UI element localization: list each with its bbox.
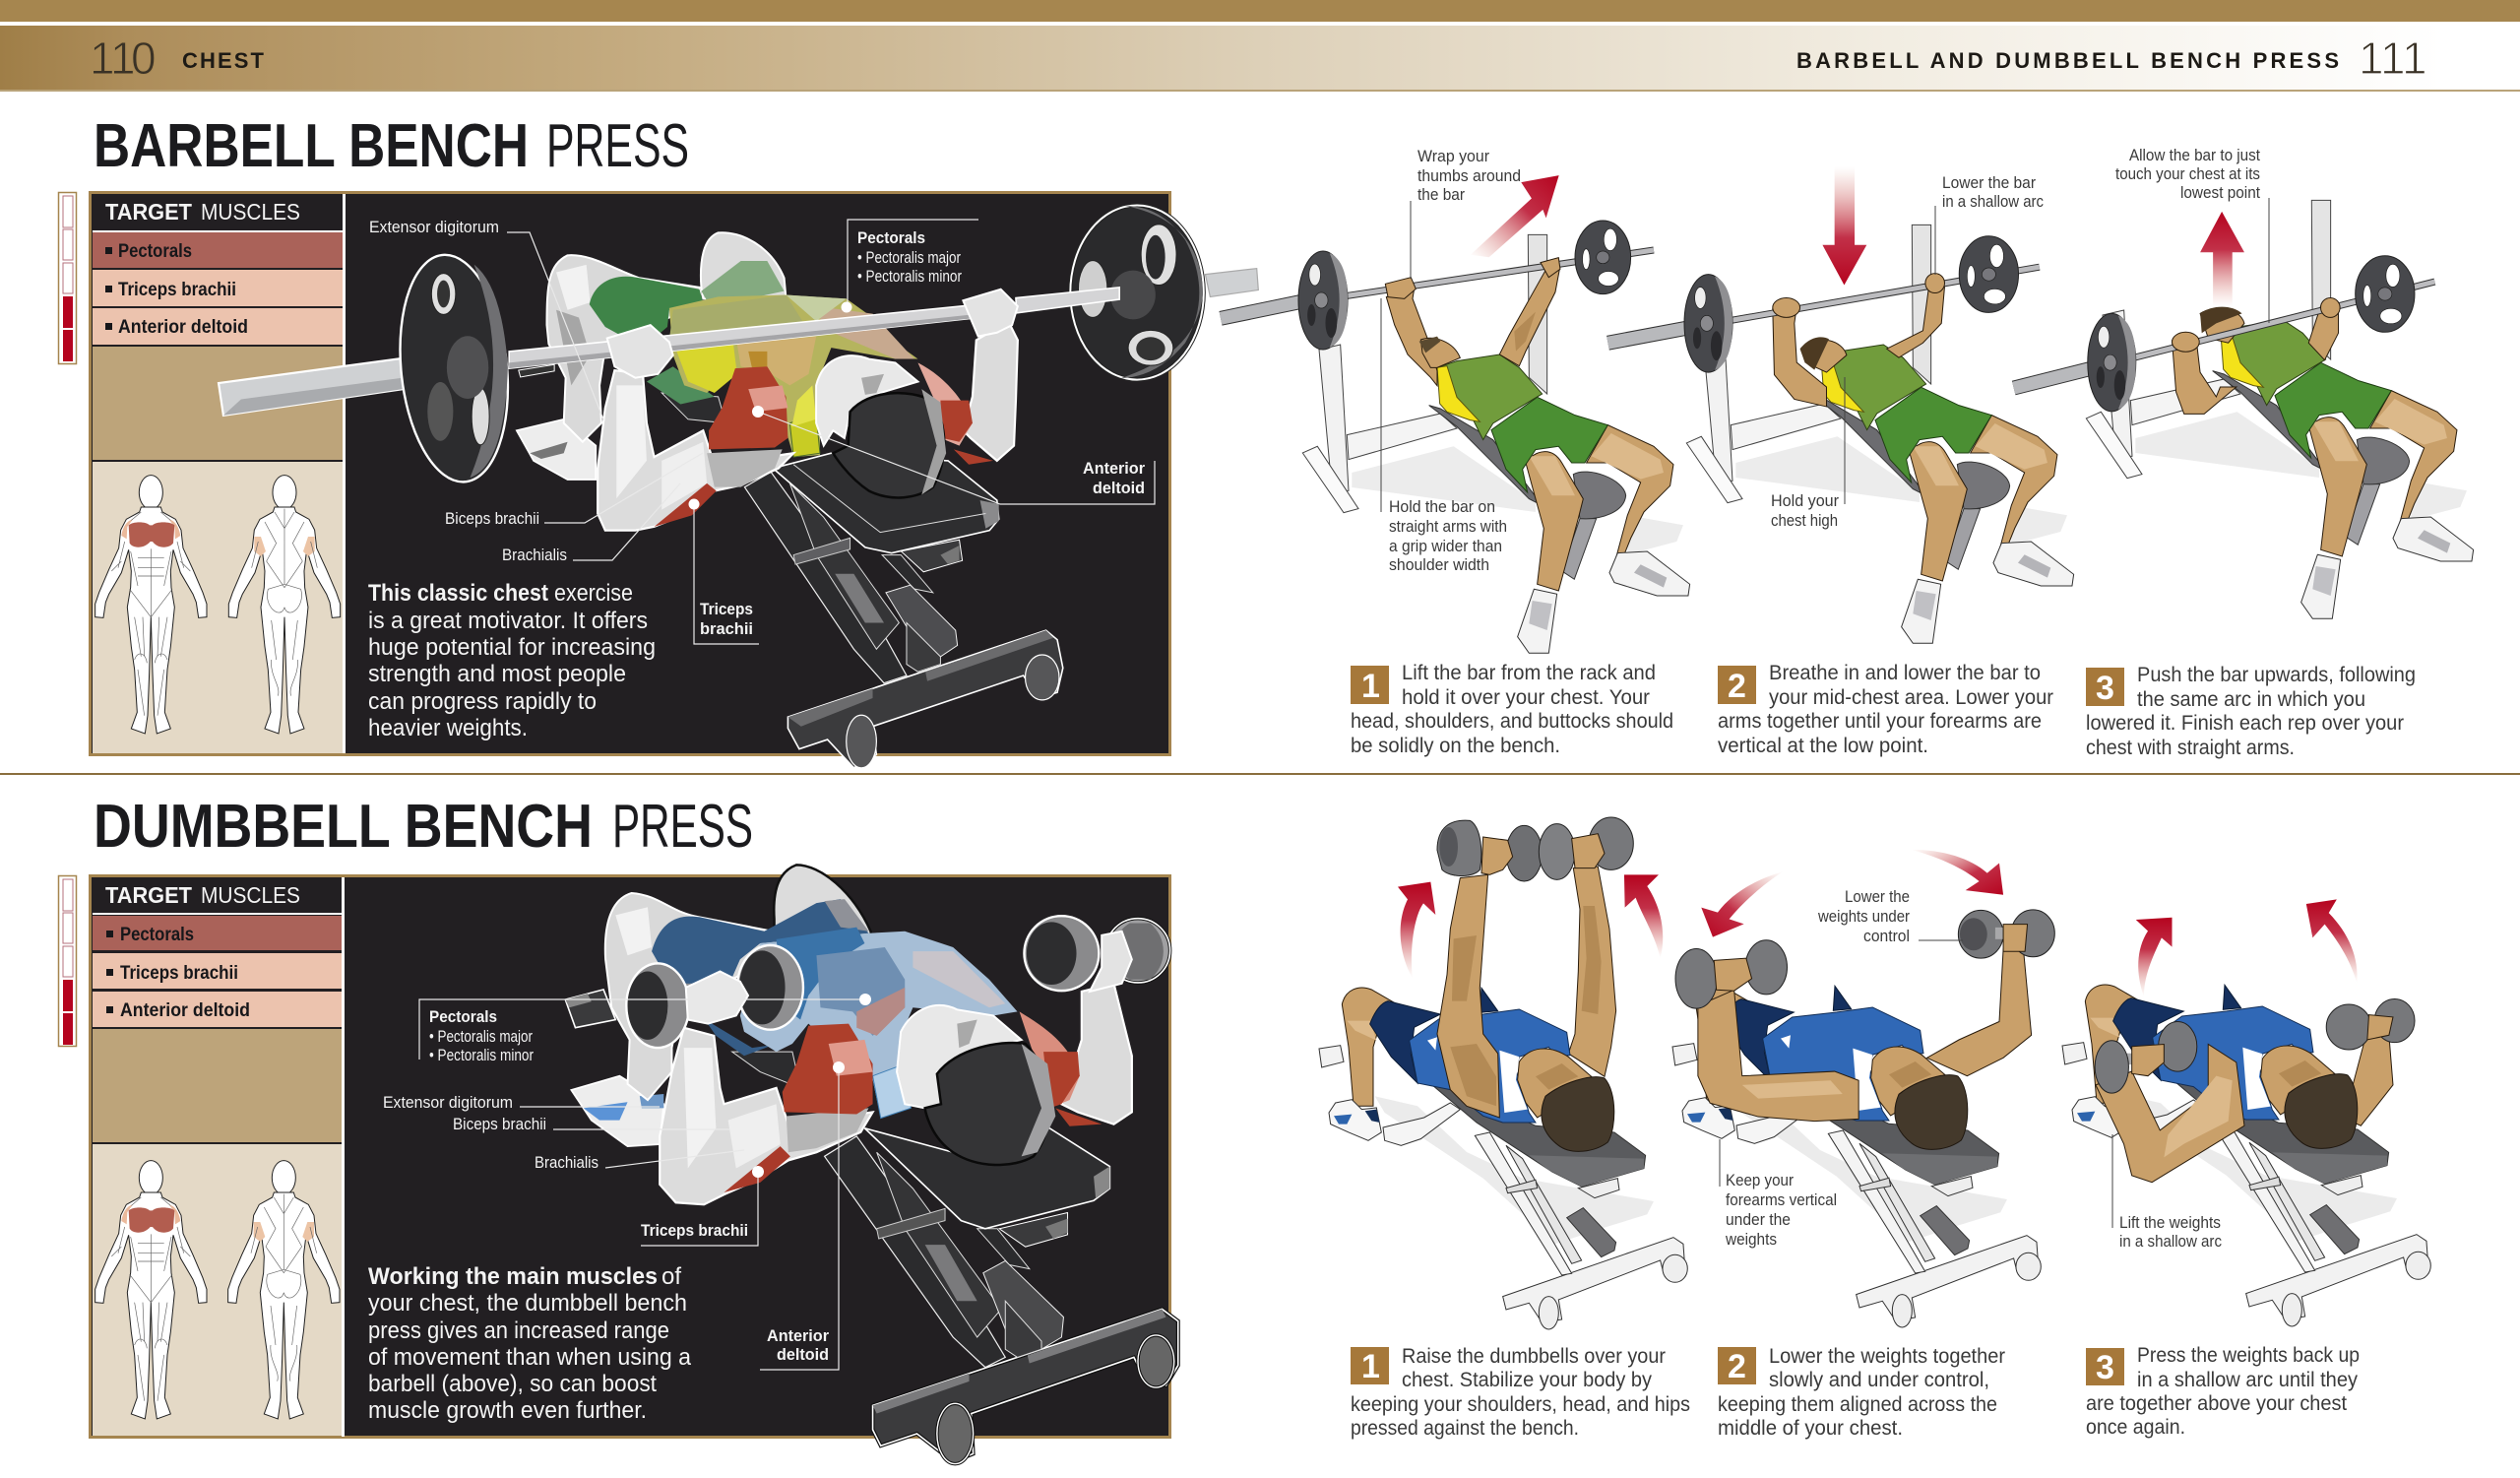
- step text: dumbbell 1: chest. Stabilize your body by: [1402, 1369, 1652, 1391]
- difficulty indicator: barbell: [59, 193, 77, 364]
- target muscles list: Pectorals: [118, 241, 192, 262]
- intro text: barbell: is a great motivator. It offers: [368, 608, 648, 634]
- callouts: barbell anatomy: Biceps brachii: [445, 509, 539, 528]
- intro text: barbell: can progress rapidly to: [368, 688, 597, 715]
- step text: barbell 1: be solidly on the bench.: [1351, 735, 1560, 757]
- step text: dumbbell 3: once again.: [2086, 1416, 2185, 1439]
- target muscles list: Anterior deltoid: [120, 1000, 250, 1021]
- step text: barbell 2: your mid-chest area. Lower your: [1769, 686, 2053, 709]
- intro text: barbell: This classic chest: [368, 580, 548, 607]
- callouts: barbell steps: straight arms with: [1389, 517, 1507, 536]
- top colour band: [0, 0, 2520, 22]
- callouts: dumbbell steps: Keep your: [1726, 1171, 1794, 1189]
- target muscles list: Anterior deltoid: [118, 317, 248, 338]
- callouts: barbell steps: Lower the bar: [1942, 173, 2036, 192]
- callouts: barbell steps: shoulder width: [1389, 555, 1489, 574]
- illustration: dumbbell press anatomical figure: [565, 865, 1178, 1464]
- callouts: dumbbell steps: under the: [1726, 1210, 1791, 1229]
- callouts: dumbbell anatomy: Pectorals: [429, 1007, 497, 1026]
- step text: barbell 2: arms together until your forearms are: [1718, 710, 2042, 733]
- near arm with triceps and deltoid: [598, 366, 793, 531]
- step text: dumbbell 3: Press the weights back up: [2137, 1344, 2360, 1367]
- callouts: barbell steps: a grip wider than: [1389, 537, 1502, 555]
- step text: dumbbell 2: [1718, 1345, 2005, 1440]
- step text: dumbbell 1: keeping your shoulders, head, and hips: [1351, 1393, 1690, 1416]
- head: [897, 1005, 1055, 1165]
- illustration: barbell step 3 figure: [2014, 200, 2474, 618]
- intro text: barbell: exercise: [554, 580, 633, 607]
- callouts: dumbbell anatomy: Biceps brachii: [453, 1115, 546, 1133]
- bench frame: [565, 990, 1178, 1464]
- callouts: barbell steps: Wrap your: [1418, 147, 1489, 165]
- callouts: barbell steps: [1381, 146, 2269, 574]
- title: barbell bench press: PRESS: [546, 112, 689, 180]
- step text: barbell 1: Lift the bar from the rack and: [1402, 662, 1656, 684]
- arrow: dumbbell step 2 left: [1701, 871, 1784, 937]
- callouts: dumbbell anatomy: Anterior: [767, 1326, 829, 1345]
- difficulty indicator: dumbbell: [59, 876, 77, 1046]
- intro text: dumbbell: of movement than when using a: [368, 1344, 691, 1371]
- illustration: dumbbell step 3 figure: [2062, 985, 2430, 1326]
- callouts: barbell steps: chest high: [1771, 511, 1838, 530]
- target muscles list: [93, 199, 343, 345]
- step text: barbell 3: chest with straight arms.: [2086, 737, 2295, 759]
- panel: dumbbell anatomy: [91, 865, 1178, 1464]
- step text: dumbbell 1: 1: [1361, 1348, 1380, 1385]
- callouts: dumbbell anatomy: [383, 994, 871, 1370]
- step text: barbell 1: head, shoulders, and buttocks should: [1351, 710, 1673, 733]
- step text: barbell 3: Push the bar upwards, following: [2137, 664, 2416, 686]
- callouts: dumbbell anatomy: Extensor digitorum: [383, 1093, 513, 1112]
- torso: [669, 295, 917, 457]
- callouts: barbell anatomy: Anterior: [1083, 459, 1145, 478]
- tan filler block: [93, 347, 343, 460]
- callouts: barbell anatomy: deltoid: [1093, 479, 1145, 497]
- target muscles list: Pectorals: [120, 925, 194, 945]
- callouts: barbell anatomy: • Pectoralis minor: [857, 267, 962, 286]
- step text: dumbbell 3: in a shallow arc until they: [2137, 1369, 2358, 1391]
- illustration: dumbbell step 2 figure: [1672, 910, 2054, 1327]
- step text: barbell 3: [2086, 664, 2416, 759]
- step text: barbell 1: [1351, 662, 1673, 757]
- target muscles list: Triceps brachii: [118, 280, 236, 300]
- callouts: barbell anatomy: Triceps: [700, 600, 753, 618]
- step text: barbell 1: 1: [1361, 668, 1380, 705]
- body map: pectorals highlighted: [93, 462, 343, 753]
- running header band: 110: [90, 32, 157, 84]
- callouts: barbell steps: in a shallow arc: [1942, 192, 2044, 211]
- running header band: [0, 26, 2520, 92]
- target muscles list: TARGET: [105, 199, 192, 225]
- callouts: dumbbell steps: forearms vertical: [1726, 1190, 1837, 1209]
- bar and hands: [509, 288, 1119, 378]
- arrow: dumbbell step 1 left: [1398, 882, 1435, 978]
- arrow: dumbbell step 1 right: [1624, 874, 1663, 958]
- step text: barbell 3: 3: [2096, 670, 2114, 707]
- shorts, navy: [652, 899, 868, 1056]
- near dumbbell with hand: [626, 945, 803, 1048]
- callouts: barbell anatomy: Brachialis: [502, 546, 567, 564]
- panel: barbell anatomy: [91, 193, 1258, 768]
- illustration: barbell plates and sleeves: [219, 205, 1258, 483]
- bench frame: [519, 364, 1063, 768]
- callouts: dumbbell anatomy: deltoid: [777, 1345, 829, 1364]
- divider between exercises: [0, 773, 2520, 775]
- callouts: barbell anatomy: Extensor digitorum: [369, 218, 499, 236]
- target muscles list: [93, 882, 342, 1027]
- far arm with deltoid: [917, 321, 1018, 465]
- callouts: barbell steps: Hold your: [1771, 491, 1839, 510]
- arrow: barbell step 1 lift: [1471, 175, 1559, 257]
- callouts: barbell steps: Allow the bar to just: [2129, 146, 2260, 164]
- intro text: dumbbell: of: [662, 1263, 681, 1290]
- step text: barbell 3: lowered it. Finish each rep over your: [2086, 712, 2404, 735]
- step text: barbell 2: vertical at the low point.: [1718, 735, 1928, 757]
- step text: dumbbell 1: pressed against the bench.: [1351, 1417, 1579, 1440]
- step text: dumbbell 1: [1351, 1345, 1690, 1440]
- step text: dumbbell 3: are together above your chest: [2086, 1392, 2347, 1415]
- callouts: dumbbell anatomy: • Pectoralis minor: [429, 1046, 534, 1064]
- step text: dumbbell 2: Lower the weights together: [1769, 1345, 2005, 1368]
- step text: dumbbell 1: Raise the dumbbells over your: [1402, 1345, 1666, 1368]
- arrow: barbell step 3 push: [2200, 212, 2244, 306]
- callouts: dumbbell steps: in a shallow arc: [2119, 1232, 2222, 1251]
- intro text: dumbbell: [368, 1263, 691, 1424]
- title: dumbbell bench press: DUMBBELL BENCH: [94, 793, 593, 861]
- target muscles list: MUSCLES: [201, 882, 300, 908]
- callouts: barbell anatomy: brachii: [700, 619, 753, 638]
- title: barbell bench press: BARBELL BENCH: [94, 112, 529, 180]
- running header band: CHEST: [182, 48, 265, 73]
- callouts: dumbbell steps: weights under: [1817, 907, 1910, 926]
- legs and shoe: [571, 865, 873, 1146]
- body map: pectorals highlighted: [93, 1144, 342, 1436]
- near arm with triceps and deltoid: [660, 1024, 873, 1204]
- illustration: barbell step 2 figure: [1607, 225, 2074, 643]
- target muscles list: Triceps brachii: [120, 963, 238, 984]
- illustration: barbell step 1 figure: [1221, 221, 1690, 653]
- running header band: 111: [2359, 32, 2427, 84]
- arrow: barbell step 2 lower: [1822, 166, 1866, 286]
- step text: dumbbell 2: middle of your chest.: [1718, 1417, 1903, 1440]
- legs and shoe: [517, 232, 787, 480]
- callouts: dumbbell steps: control: [1863, 927, 1910, 945]
- step text: dumbbell 3: 3: [2096, 1349, 2114, 1386]
- intro text: dumbbell: press gives an increased range: [368, 1317, 669, 1344]
- target muscles list: MUSCLES: [201, 199, 300, 225]
- callouts: dumbbell steps: Lift the weights: [2119, 1213, 2221, 1232]
- callouts: dumbbell steps: weights: [1725, 1230, 1777, 1249]
- intro text: barbell: huge potential for increasing: [368, 634, 656, 661]
- far dumbbell: [1024, 916, 1170, 992]
- step text: barbell 2: [1718, 662, 2053, 757]
- callouts: barbell steps: Hold the bar on: [1389, 497, 1495, 516]
- illustration: dumbbell step 1 figure: [1319, 817, 1687, 1329]
- arrow: dumbbell step 3 right: [2306, 899, 2358, 983]
- step text: dumbbell 2: keeping them aligned across the: [1718, 1393, 1997, 1416]
- head: [816, 355, 946, 497]
- step text: dumbbell 3: [2086, 1344, 2360, 1439]
- arrow: dumbbell step 2 right: [1911, 850, 2003, 895]
- callouts: barbell anatomy: Pectorals: [857, 228, 925, 247]
- tan filler block: [93, 1029, 342, 1142]
- intro text: barbell: heavier weights.: [368, 715, 528, 741]
- intro text: dumbbell: barbell (above), so can boost: [368, 1371, 657, 1397]
- intro text: barbell: [368, 580, 656, 741]
- illustration: barbell press anatomical figure: [509, 232, 1119, 768]
- intro text: barbell: strength and most people: [368, 661, 626, 687]
- callouts: dumbbell anatomy: • Pectoralis major: [429, 1027, 533, 1046]
- callouts: dumbbell steps: [1720, 887, 2222, 1251]
- shorts, green: [590, 261, 785, 404]
- torso: [740, 899, 1018, 1119]
- arrow: dumbbell step 3 left: [2136, 918, 2173, 996]
- title: dumbbell bench press: PRESS: [612, 793, 753, 861]
- callouts: barbell steps: lowest point: [2180, 183, 2260, 202]
- step text: barbell 1: hold it over your chest. Your: [1402, 686, 1650, 709]
- callouts: barbell steps: thumbs around: [1418, 166, 1521, 185]
- intro text: dumbbell: your chest, the dumbbell bench: [368, 1290, 687, 1317]
- step text: dumbbell 2: 2: [1728, 1348, 1746, 1385]
- target muscles list: TARGET: [105, 882, 192, 908]
- step text: dumbbell 2: slowly and under control,: [1769, 1369, 1989, 1391]
- callouts: dumbbell anatomy: Triceps brachii: [641, 1221, 748, 1240]
- callouts: dumbbell steps: Lower the: [1845, 887, 1910, 906]
- intro text: dumbbell: muscle growth even further.: [368, 1397, 647, 1424]
- intro text: dumbbell: Working the main muscles: [368, 1263, 658, 1290]
- callouts: barbell steps: touch your chest at its: [2115, 164, 2260, 183]
- running header band: BARBELL AND DUMBBELL BENCH PRESS: [1796, 48, 2339, 73]
- callouts: barbell anatomy: [369, 218, 1155, 644]
- callouts: dumbbell anatomy: Brachialis: [535, 1153, 598, 1172]
- callouts: barbell steps: the bar: [1418, 185, 1465, 204]
- step text: barbell 3: the same arc in which you: [2137, 688, 2365, 711]
- step text: barbell 2: Breathe in and lower the bar to: [1769, 662, 2041, 684]
- step text: barbell 2: 2: [1728, 668, 1746, 705]
- callouts: barbell anatomy: • Pectoralis major: [857, 248, 961, 267]
- far arm with deltoid: [1020, 984, 1132, 1126]
